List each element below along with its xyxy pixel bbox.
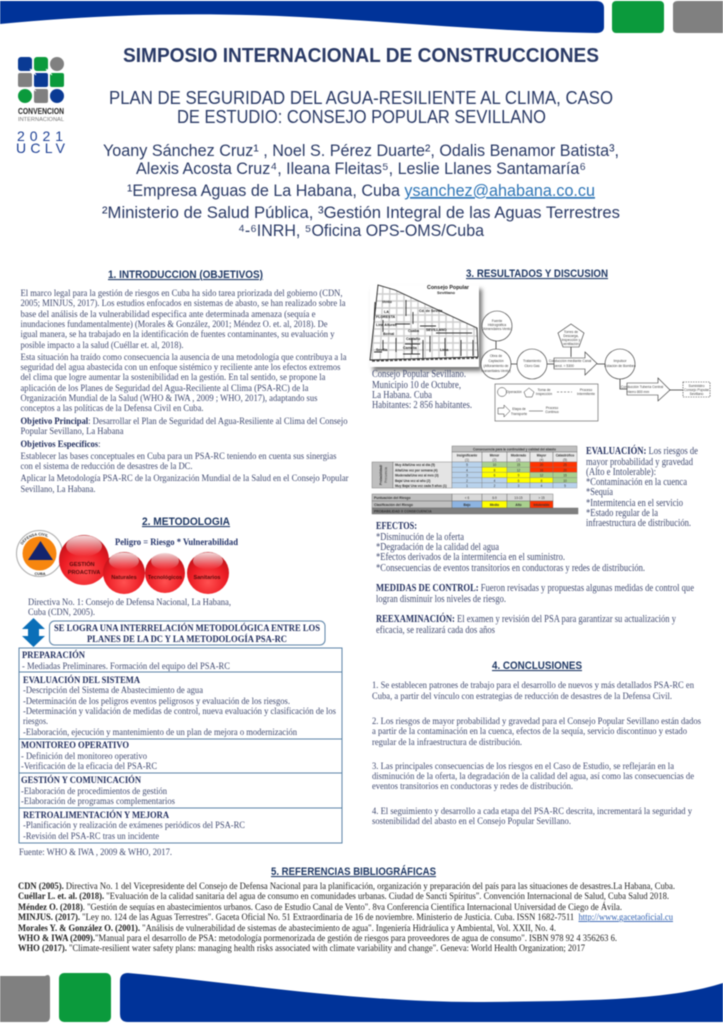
table: risk matrix: 6 [518, 479, 520, 483]
text block: introduccion: Aplicar la Metodología PSA-RC de la Organización Mundial de la Salud en el Consejo Popular [20, 473, 348, 483]
panel: monitoreo operativo [19, 739, 342, 773]
legend: flow diagram: Proceso [580, 388, 592, 392]
heading: referencias: 5. REFERENCIAS BIBLIOGRÁFICAS [271, 865, 436, 878]
table: risk matrix: 6 [494, 474, 496, 478]
panel: evaluacion del sistema: -Determinación de los peligros eventos peligrosos y evaluación de los riesgos. [23, 696, 290, 706]
table: risk matrix: 20 [563, 468, 567, 472]
panel: evaluacion del sistema: -Descripción del Sistema de Abastecimiento de agua [23, 685, 203, 695]
flow diagram: water supply: Hidrográfica [488, 323, 506, 327]
caption: map: Habitantes: 2 856 habitantes. [372, 400, 472, 411]
text block: conclusiones [372, 680, 701, 826]
panel: gestion y comunicacion: -Elaboración de procedimientos de gestión [21, 786, 167, 796]
authors: Yoany Sánchez Cruz¹ , Noel S. Pérez Duarte², Odalis Benamor Batista³, [103, 141, 619, 160]
table: risk matrix: Alta/Una vez por semana (4) [395, 468, 438, 472]
caption: directiva: Directiva No. 1: Consejo de Defensa Nacional, La Habana, [28, 597, 231, 607]
table: risk matrix: (2) [493, 458, 496, 462]
table: risk matrix: Frecuencia [384, 467, 388, 483]
table: risk matrix: 5 [564, 484, 566, 488]
text block: introduccion: inundaciones fundamentalmente) (Morales & González, 2001; Méndez O. et. al, 2018). De [20, 319, 328, 329]
caption: map: Consejo Popular Sevillano. [372, 369, 466, 380]
map: Consejo Popular Sevillano: Vento [382, 300, 393, 304]
legend: flow diagram: Proceso [546, 406, 558, 410]
table: risk matrix: 9 [518, 474, 520, 478]
table: risk matrix: 16 [540, 468, 543, 472]
table: risk matrix: 25 [563, 463, 567, 467]
flow diagram: water supply: Impulsor [613, 359, 627, 363]
caption: map: Municipio 10 de Octubre, [372, 380, 461, 391]
text block: referencias: Morales Y. & González O. (2001). "Análisis de vulnerabilidad de sistemas de abastecimiento de agua". Ingeniería Hidráulica y Ambiental, Vol. XXII, No. 4. [18, 923, 556, 933]
panel: monitoreo operativo: - Definición del monitoreo operativo [21, 751, 147, 761]
heading: metodologia: 2. METODOLOGIA [142, 516, 230, 528]
text block: evaluacion: EVALUACIÓN: Los riesgos de [586, 445, 698, 457]
table: risk matrix: (4) [540, 458, 543, 462]
map: Consejo Popular Sevillano: Consejo Popular [427, 285, 469, 291]
flow diagram: water supply: ventilación [563, 342, 579, 346]
source note: Fuente: WHO & IWA , 2009 & WHO, 2017. [19, 847, 172, 857]
table: risk matrix: 8 [494, 468, 496, 472]
text block: conclusiones: 4. El seguimiento y desarrollo a cada etapa del PSA-RC descrita, incrementará la seguridad y [372, 806, 692, 816]
diagram: risk spheres [59, 535, 229, 594]
text block: referencias: CDN (2005). Directiva No. 1 del Vicepresidente del Consejo de Defensa Nacional para la planificación, organización y preparación del país para las situaciones de desastres.La Habana, Cuba. [18, 881, 675, 891]
flow diagram: water supply: Tratamiento [523, 359, 541, 363]
table: risk classification [372, 494, 578, 514]
table: risk matrix: (3) [517, 458, 520, 462]
map: Consejo Popular Sevillano [370, 285, 482, 371]
text block: evaluacion: mayor probabilidad y gravedad [586, 457, 694, 468]
panel: preparacion: PREPARACIÓN [22, 650, 85, 660]
flow diagram: water supply: (Almendares-Vento) [482, 327, 512, 331]
text block: evaluacion: (Alto e Intolerable): [586, 467, 656, 478]
text block: evaluacion [586, 445, 698, 529]
flow diagram: water supply: Consejo Popular [684, 388, 710, 392]
text block: introduccion: Organización Mundial de la Salud (WHO & IWA , 2009 ; WHO, 2017), adaptando sus [20, 393, 318, 403]
table: risk classification: 10-15 [514, 496, 523, 500]
text block: introduccion: Objetivo Principal: Desarrollar el Plan de Seguridad del Agua-Resiliente al Clima del Consejo [20, 416, 348, 426]
table: risk classification: Clasificación del Riesgo [374, 503, 413, 507]
map: Consejo Popular Sevillano: FLORESTA [376, 315, 396, 319]
flow diagram: water supply: Suministro [688, 384, 705, 388]
affiliations [102, 181, 620, 240]
caption: directiva: Cuba (CDN, 2005). [28, 607, 95, 617]
flow diagram: water supply: Conducción Tubería Central [621, 385, 663, 389]
table: risk matrix: 2 [466, 479, 468, 483]
callout: interrelacion [50, 621, 325, 645]
authors: Alexis Acosta Cruz⁴, Ileana Fleitas⁵, Leslie Llanes Santamaría⁶ [136, 159, 586, 178]
map: Consejo Popular Sevillano: Cuaba [408, 329, 420, 333]
text block: conclusiones: 2. Los riesgos de mayor probabilidad y gravedad para el Consejo Popular Sevillano están dados [372, 716, 701, 726]
heading: conclusiones: 4. CONCLUSIONES [492, 660, 582, 672]
table: risk matrix: 15 [563, 474, 567, 478]
panel: gestion y comunicacion: GESTIÓN Y COMUNICACIÓN [21, 775, 141, 785]
table: risk matrix: Muy Baja/ Una vez cada 5 años (1) [395, 484, 447, 488]
formula: Peligro = Riesgo * Vulnerabilidad [115, 538, 239, 548]
table: risk classification: 6-9 [492, 496, 497, 500]
caption: directiva [28, 597, 231, 617]
panel: evaluacion del sistema [19, 672, 342, 739]
legend: flow diagram: Toma de [537, 388, 551, 392]
table: risk classification: Alto [515, 503, 522, 507]
caption: map: La Habana. Cuba [372, 390, 432, 401]
table: risk matrix: Probabilidad/ [379, 465, 383, 485]
panel: gestion y comunicacion: -Elaboración de programas complementarios [21, 796, 175, 806]
legend: flow diagram: Continuo [545, 410, 559, 414]
map: Consejo Popular Sevillano: SEVILLANO [426, 328, 447, 332]
flow diagram: water supply: Obra de [490, 354, 502, 358]
heading: introduccion: 1. INTRODUCCION (OBJETIVOS) [108, 269, 263, 281]
panel: evaluacion del sistema: -Determinación y validación de medidas de control, nueva evaluación y clasificación de los [23, 706, 336, 716]
icon: Defensa Civil emblem: CUBA [35, 572, 46, 576]
map: Consejo Popular Sevillano: Lima [440, 348, 449, 352]
table: risk matrix: 4 [494, 479, 496, 483]
text block: introduccion: del clima que logre aumentar la sostenibilidad en la gestión. En tal sentido, se propone la [20, 372, 326, 382]
text block: medidas de control [376, 583, 694, 605]
table: risk matrix: 12 [540, 474, 543, 478]
flow diagram: water supply: Descarga, [563, 334, 579, 338]
map: Consejo Popular Sevillano: Sevillano [437, 291, 456, 295]
text block: conclusiones: a partir de la contaminación en la cuenca, efectos de la sequía, servicio discontinuo y estado [372, 726, 687, 736]
text block: evaluacion: infraestructura de distribución. [586, 518, 691, 529]
map: Consejo Popular Sevillano: Lina Alturas [376, 323, 397, 327]
text block: introduccion: igual manera, se ha trabajado en la identificación de fuentes contaminantes, su evaluación y [20, 329, 335, 339]
table: risk classification: > 15 [538, 496, 545, 500]
flow diagram: water supply: Estación de Bombeo [604, 364, 636, 368]
text block: conclusiones: eventos transitorios en conductoras y redes de distribución. [372, 781, 573, 791]
flow diagram: water supply: Hierro 800 mm [627, 390, 649, 394]
icon: double arrow [22, 618, 45, 647]
table: risk matrix: (1) [465, 458, 469, 462]
callout: interrelacion: PLANES DE LA DC Y LA METODOLOGÍA PSA-RC [87, 634, 287, 644]
text block: evaluacion: *Estado regular de la [586, 508, 658, 519]
text block: referencias [18, 881, 675, 953]
text block: evaluacion: *Sequía [586, 487, 613, 498]
flow diagram: water supply [481, 311, 710, 401]
table: risk matrix: Catastrófico [556, 454, 574, 458]
panel: retroalimentacion y mejora: -Planificación y realización de exámenes periódicos del PSA-RC [23, 820, 245, 830]
text block: introduccion: Sevillano, La Habana. [20, 484, 96, 494]
table: risk matrix: Menor [490, 454, 500, 458]
table: risk matrix: Mayor [537, 454, 547, 458]
caption: map [372, 369, 472, 411]
diagram: risk spheres: Tecnológicos [148, 575, 182, 581]
flow diagram: water supply: Captación [488, 359, 504, 363]
map: Consejo Popular Sevillano: Cd. de Sevilla [419, 309, 443, 313]
text block: referencias: WHO (2017). "Climate-resilient water safety plans: managing health risks associated with climate variability and change". Geneva: World Health Organization; 2017 [18, 943, 585, 953]
flow diagram: water supply: manantiales-Vento) [481, 369, 511, 373]
panel: evaluacion del sistema: riesgos. [23, 716, 48, 726]
text block: conclusiones: 1. Se establecen patrones de trabajo para el desarrollo de nuevos y más detallados PSA-RC en [372, 680, 694, 690]
panel: evaluacion del sistema: EVALUACIÓN DEL SISTEMA [23, 675, 140, 685]
table: risk matrix: 3 [466, 474, 468, 478]
logo: Convencion Internacional: INTERNACIONAL [18, 117, 64, 123]
diagram: risk spheres: Naturales [111, 575, 137, 581]
text block: introduccion [20, 288, 348, 494]
flow diagram: water supply: perol. = 5300 [554, 364, 574, 368]
text block: introduccion: aplicación de los Planes de Seguridad del Agua-Reciliente al Clima (PSA-RC) de la [20, 383, 308, 393]
legend: flow diagram: Transporte [511, 412, 527, 416]
table: risk matrix: 2 [494, 484, 496, 488]
table: risk classification: Bajo [464, 503, 470, 507]
text block: conclusiones: regular de la infraestructura de distribución. [372, 737, 522, 747]
table: risk matrix: 8 [541, 479, 543, 483]
panel: gestion y comunicacion [19, 773, 342, 808]
diagram: risk spheres: PROACTIVA [68, 570, 100, 576]
text block: efectos [376, 521, 645, 574]
legend: flow diagram [495, 384, 598, 421]
text block: referencias: Méndez O. (2018). "Gestión de sequías en abastecimientos urbanos. Caso de Estudio Canal de Vento". 8va Conferencia Científica Internacional Universidad de Ciego de Ávila. [18, 902, 622, 912]
panel: retroalimentacion y mejora: RETROALIMENTACIÓN Y MEJORA [23, 810, 169, 820]
text block: referencias: Cuéllar L. et. al. (2018). "Evaluación de la calidad sanitaria del agua de consumo en comunidades urbanas. Ciudad de Sancti Spíritus". Convención Internacional de Salud, Cuba Salud 2018. [18, 891, 669, 901]
table: risk matrix: 4 [466, 468, 468, 472]
logo: Convencion Internacional [16, 57, 66, 156]
map: Consejo Popular Sevillano: Camelia [403, 346, 418, 350]
text block: reexaminacion: eficacia, se realizará cada dos años [376, 625, 495, 636]
text block: reexaminacion: REEXAMINACIÓN: El examen y revisión del PSA para garantizar su actualización y [376, 613, 677, 625]
text block: evaluacion: *Intermitencia en el servicio [586, 498, 683, 509]
table: risk matrix [372, 446, 577, 488]
map: Consejo Popular Sevillano: Castaño [406, 337, 421, 341]
table: risk matrix: (5) [563, 458, 567, 462]
flow diagram: water supply: inspección y [562, 338, 581, 342]
panel: retroalimentacion y mejora [19, 808, 342, 843]
logo: Convencion Internacional: CONVENCION [18, 107, 64, 116]
icon: Defensa Civil emblem: DEFENSA CIVIL [20, 532, 48, 546]
table: risk matrix: 10 [493, 463, 496, 467]
table: risk matrix: Muy Alta/Una vez al día (5) [395, 463, 435, 467]
legend: flow diagram: Etapa de [512, 407, 526, 411]
table: risk matrix: 10 [563, 479, 567, 483]
footer banner [0, 973, 723, 1022]
legend: flow diagram: Inspección [536, 392, 552, 396]
title: SIMPOSIO INTERNACIONAL DE CONSTRUCCIONES [123, 45, 599, 67]
text block: reexaminacion [376, 613, 677, 636]
table: risk matrix: Baja/ Una vez al año (2) [395, 479, 430, 483]
text block: introduccion: Esta situación ha traído como consecuencia la ausencia de una metodología que contribuya a la [20, 352, 346, 362]
text block: conclusiones: sostenibilidad del abasto en el Consejo Popular Sevillano. [372, 816, 571, 826]
table: risk matrix: 3 [518, 484, 520, 488]
table: risk matrix: 20 [540, 463, 543, 467]
text block: introduccion: con el sistema de reducción de desastres de la DC. [20, 461, 192, 471]
map: Consejo Popular Sevillano: Sevilla [376, 348, 388, 352]
panel: preparacion [19, 648, 342, 672]
table: risk matrix: 12 [517, 468, 520, 472]
subtitle [109, 88, 613, 127]
text block: introduccion: El marco legal para la gestión de riesgos en Cuba ha sido tarea priorizada del gobierno (CDN, [20, 288, 342, 298]
table: risk classification: Intolerable [533, 503, 550, 507]
text block: introduccion: 2005; MINJUS, 2017). Los estudios enfocados en sistemas de abasto, se han realizado sobre la [20, 298, 346, 308]
heading: resultados: 3. RESULTADOS Y DISCUSION [466, 268, 608, 280]
table: risk matrix: Moderado [511, 454, 526, 458]
subtitle: PLAN DE SEGURIDAD DEL AGUA-RESILIENTE AL CLIMA, CASO [109, 88, 613, 108]
text block: introduccion: posible impacto a la salud (Cuéllar et. al, 2018). [20, 340, 184, 350]
diagram: risk spheres: Sanitarios [193, 575, 221, 581]
text block: evaluacion: *Contaminación en la cuenca [586, 477, 687, 488]
flow diagram: water supply: Conducción mediante Canal [549, 359, 592, 363]
table: risk classification: PROBABILIDAD X CONSECUENCIA [374, 510, 432, 514]
flow diagram: water supply: Fuente [492, 319, 502, 323]
text block: efectos: *Efectos derivados de la intermitencia en el suministro. [376, 552, 565, 563]
affiliations: ⁴-⁶INRH, ⁵Oficina OPS-OMS/Cuba [238, 221, 485, 240]
panel: preparacion: - Mediadas Preliminares. Formación del equipo del PSA-RC [22, 661, 230, 671]
text block: introduccion: Establecer las bases conceptuales en Cuba para un PSA-RC teniendo en cuenta sus sinergias [20, 451, 337, 461]
authors [103, 141, 619, 178]
flow diagram: water supply: Cloro Gas [524, 364, 540, 368]
legend: flow diagram: Intermitente [577, 392, 595, 396]
text block: introduccion: base del análisis de la vulnerabilidad especifica ante determinada amenaza (sequía e [20, 309, 316, 319]
flow diagram: water supply: Sevillano [690, 392, 703, 396]
table: risk classification: Puntuación del Riesgo [374, 496, 411, 500]
table: risk classification: < 6 [465, 496, 469, 500]
legend: flow diagram: Operación [506, 390, 522, 394]
text block: conclusiones: disminución de la oferta, la degradación de la calidad del agua, así como las consecuencias de [372, 771, 694, 781]
table: risk matrix: Moderada/Una vez al mes (3) [395, 474, 439, 478]
flow diagram: water supply: Torres de [564, 330, 578, 334]
logo: Convencion Internacional: 2021 [17, 128, 63, 144]
panel: evaluacion del sistema: -Elaboración, ejecución y mantenimiento de un plan de mejora o modernización [23, 727, 297, 737]
panel: monitoreo operativo: MONITOREO OPERATIVO [21, 740, 129, 750]
table: risk matrix: 4 [541, 484, 543, 488]
flow diagram: water supply: (Afloramiento de [484, 364, 509, 368]
panel: retroalimentacion y mejora: -Revisión del PSA-RC tras un incidente [23, 831, 159, 841]
logo: Convencion Internacional: UCLV [16, 140, 66, 156]
table: risk matrix: Insignificante [457, 454, 477, 458]
header banner [0, 1, 723, 33]
text block: efectos: *Degradación de la calidad del agua [376, 542, 499, 553]
text block: conclusiones: 3. Las principales consecuencias de los riesgos en el Caso de Estudio, se reflejarán en la [372, 761, 674, 771]
icon: Defensa Civil emblem [16, 530, 63, 578]
text block: conclusiones: Cuba, a partir del vínculo con estrategias de reducción de desastres de la Defensa Civil. [372, 691, 672, 701]
table: risk classification: Medio [490, 503, 499, 507]
text block: introduccion: conceptos a las políticas de la Defensa Civil en Cuba. [20, 403, 204, 413]
affiliations: ²Ministerio de Salud Pública, ³Gestión Integral de las Aguas Terrestres [102, 203, 620, 222]
text block: introduccion: Objetivos Específicos: [20, 439, 100, 449]
text block: efectos: *Disminución de la oferta [376, 532, 464, 543]
table: risk matrix: 15 [517, 463, 520, 467]
text block: introduccion: seguridad del agua abastecida con un enfoque sistémico y reciliente ante los efectos extremos [20, 362, 341, 372]
table: risk matrix: 5 [466, 463, 468, 467]
panel: monitoreo operativo: -Verificación de la eficacia del PSA-RC [21, 761, 157, 771]
diagram: risk spheres: GESTIÓN [69, 560, 95, 568]
subtitle: DE ESTUDIO: CONSEJO POPULAR SEVILLANO [177, 107, 546, 127]
table: risk matrix: Consecuencia para la continuidad y calidad del abasto [473, 448, 556, 452]
map: Consejo Popular Sevillano: LA [384, 310, 389, 314]
text block: efectos: *Consecuencias de eventos transitorios en conductoras y redes de distribución. [376, 563, 645, 574]
text block: referencias: WHO & IWA (2009)."Manual para el desarrollo de PSA: metodología pormenorizada de gestión de riesgos para proveedores de agua de consumo". ISBN 978 92 4 356263 6. [18, 933, 617, 943]
text block: introduccion: Popular Sevillano, La Habana [20, 426, 124, 436]
text block: referencias: MINJUS. (2017). "Ley no. 124 de las Aguas Terrestres". Gaceta Oficial No. 51 Extraordinaria de 16 de noviembre. Ministerio de Justicia. Cuba. ISSN 1682-7511 http://www.gacetaoficial.cu [18, 912, 673, 922]
map: Consejo Popular Sevillano: Bernal [383, 332, 394, 336]
callout: interrelacion: SE LOGRA UNA INTERRELACIÓN METODOLÓGICA ENTRE LOS [54, 623, 320, 633]
table: risk matrix: 1 [466, 484, 468, 488]
text block: efectos: EFECTOS: [376, 521, 417, 532]
text block: medidas de control: logran disminuir los niveles de riesgo. [376, 594, 506, 605]
affiliations: ¹Empresa Aguas de La Habana, Cuba ysanchez@ahabana.co.cu [127, 181, 595, 200]
